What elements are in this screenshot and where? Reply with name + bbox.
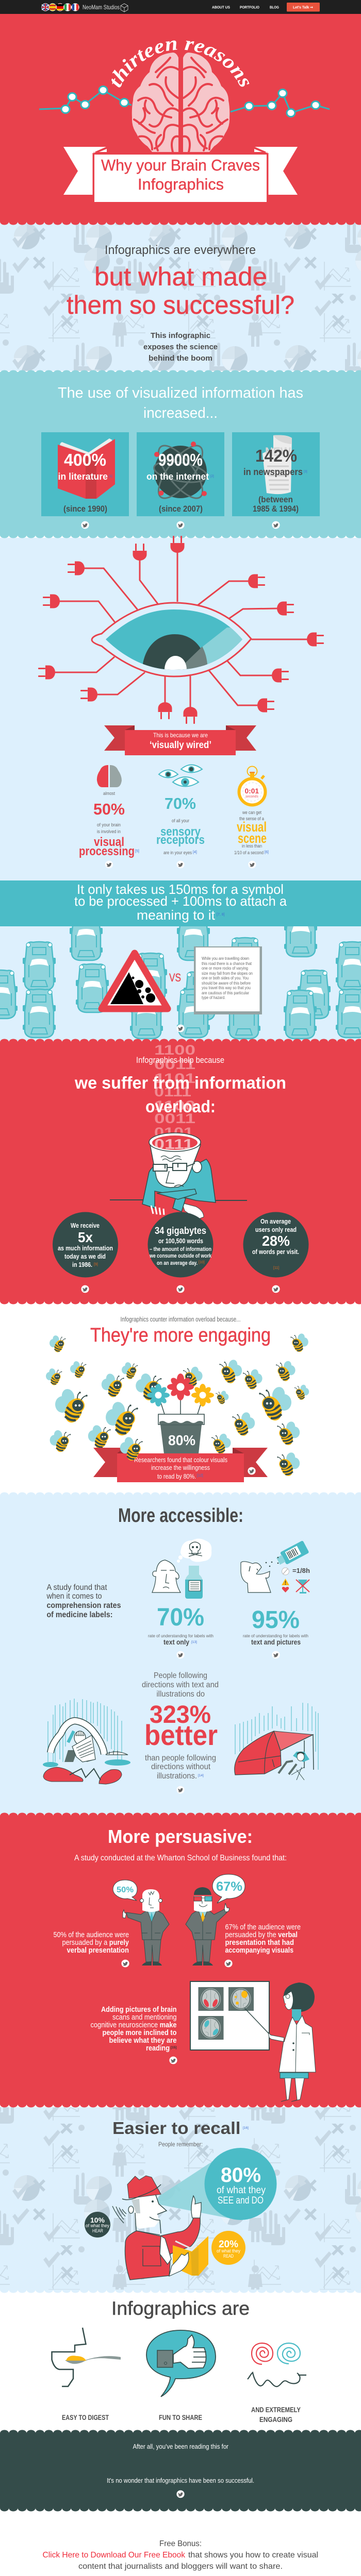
text: with visuals: persuaded by the verbal xyxy=(225,1930,298,1939)
section: conclusion: It's no wonder that infographics have been so successful. xyxy=(107,2477,254,2484)
circle: 34 gigabytes: 34 gigabytes xyxy=(155,1226,206,1236)
button: Let's Talk ➞ xyxy=(293,5,314,9)
illustration: flower pot xyxy=(147,1374,214,1454)
circle: 10%: HEAR xyxy=(92,2228,103,2233)
band: 150ms xyxy=(0,880,361,926)
heading: [16] xyxy=(243,2126,249,2130)
text: 323% better: [14] xyxy=(198,1774,204,1777)
panel: warning text: you travel this way so that you xyxy=(202,985,251,990)
text: 323% better: directions without xyxy=(151,1762,211,1771)
heading: People remember: xyxy=(158,2141,203,2148)
heading: Infographics are xyxy=(111,2298,250,2319)
heading xyxy=(112,2119,249,2148)
card: internet: [2] xyxy=(210,475,214,478)
chart line: right pulse xyxy=(231,90,330,116)
stat: 70% sensory receptors xyxy=(156,765,205,868)
arched title: thirteen reasons: thirteen reasons xyxy=(111,40,250,88)
intro text: Infographics are everywhere xyxy=(105,243,256,257)
panel: warning text: size may fall from the slopes on xyxy=(202,971,253,976)
text: brain scans claim: believe what they are xyxy=(109,2036,176,2045)
text: medicine labels intro: when it comes to xyxy=(46,1592,102,1601)
section: visually wired xyxy=(0,535,361,880)
section: more accessible xyxy=(0,1492,361,1815)
text: 323% better: illustrations. xyxy=(157,1772,197,1781)
icon: book xyxy=(58,438,115,499)
text: medicine labels intro: of medicine labels: xyxy=(46,1611,112,1619)
labels xyxy=(62,2405,301,2424)
share icon xyxy=(121,1960,129,1967)
navigation: PORTFOLIO xyxy=(240,5,259,9)
stat: 70% sensory receptors: sensory xyxy=(160,825,201,839)
stat: 70% text only: [13] xyxy=(191,1640,197,1644)
ribbon: 80%: increase the willingness xyxy=(151,1464,210,1471)
circle: 28%: [11] xyxy=(273,1266,279,1270)
navigation: BLOG xyxy=(270,5,279,9)
stat: 95% text and pictures xyxy=(243,1606,308,1658)
circle: 20%: READ xyxy=(223,2253,234,2259)
free bonus: that shows you how to create visual xyxy=(188,2551,318,2560)
text: 323% better: 323% xyxy=(150,1701,211,1728)
section: intro xyxy=(0,222,361,371)
card: newspapers: 142% xyxy=(255,446,297,465)
section: hero xyxy=(0,14,361,222)
labels: ENGAGING xyxy=(259,2415,292,2424)
text: brain scans claim: people more inclined to xyxy=(102,2028,176,2037)
card: internet: (since 2007) xyxy=(159,504,203,514)
illustration: man with pictogram label: =1/8h xyxy=(292,1567,310,1574)
callout: 50% speech bubble xyxy=(113,1880,137,1901)
panel: warning text: type of hazard. xyxy=(202,995,225,1000)
circle: 80%: 80% xyxy=(221,2164,261,2187)
card: internet: on the internet xyxy=(146,471,209,482)
binary stream: 1100 xyxy=(154,1042,195,1058)
circle: 20%: 20% xyxy=(219,2239,238,2250)
stat: 95% text and pictures: 95% xyxy=(252,1606,300,1634)
icon: skull xyxy=(189,1542,202,1556)
illustration: man reading xyxy=(112,2176,208,2280)
icon: warning sign xyxy=(102,953,168,1009)
free bonus xyxy=(42,2539,318,2571)
icon: stopwatch: seconds xyxy=(245,795,258,799)
stat: visual scene: 1/10 of a second xyxy=(234,850,264,856)
stat: 70% sensory receptors: of all your xyxy=(172,818,189,824)
beam xyxy=(154,2159,233,2219)
label: vs: VS xyxy=(169,971,181,984)
ribbon: 80%: [12] xyxy=(197,1474,203,1478)
heading: More accessible: xyxy=(118,1505,243,1527)
icon: thumbs up bubble xyxy=(146,2330,216,2397)
share icons xyxy=(81,1285,280,1293)
icon: brain xyxy=(132,53,229,152)
card: literature: in literature xyxy=(58,471,108,482)
card: newspapers: [3] xyxy=(304,470,307,473)
stat: 50% visual processing: processing xyxy=(79,844,135,858)
icon: brain halves xyxy=(97,765,122,787)
heading: increased... xyxy=(143,405,218,421)
stat: visual scene: we can get xyxy=(242,810,261,816)
text: with visuals: accompanying visuals xyxy=(225,1946,293,1955)
labels: AND EXTREMELY xyxy=(251,2405,301,2414)
binary stream: 1101 xyxy=(154,1071,195,1086)
navigation xyxy=(212,5,279,9)
stat: visual scene xyxy=(234,767,269,868)
stat: 70% sensory receptors: 70% xyxy=(165,794,196,812)
card: internet: 9900% xyxy=(158,450,203,469)
share icons xyxy=(81,521,280,529)
callout: 50% speech bubble: 50% xyxy=(117,1886,134,1894)
share icon xyxy=(169,2057,177,2064)
text: purely verbal: persuaded by a purely xyxy=(62,1938,129,1947)
text: brain scans claim: reading xyxy=(146,2044,170,2053)
panel: warning text: one or more rocks of varying xyxy=(202,965,248,971)
heading xyxy=(90,1316,271,1346)
text: brain scans claim: cognitive neuroscience make xyxy=(91,2021,176,2029)
card: literature: [1] xyxy=(109,475,112,478)
stat: visual scene: [6] xyxy=(265,851,269,854)
text: 323% better: directions with text and xyxy=(142,1681,219,1689)
circle: 5x: We receive xyxy=(71,1222,100,1229)
card: newspapers: (between xyxy=(258,495,293,504)
intro text: but what made xyxy=(94,262,267,291)
circle: 10%: of what they xyxy=(86,2223,109,2228)
banner title text: Why your Brain Craves xyxy=(101,156,260,174)
bees xyxy=(46,1333,309,1478)
callout: 67% speech bubble: 67% xyxy=(216,1879,242,1894)
icon: dizzy face xyxy=(248,2343,306,2386)
stat: visual scene: scene xyxy=(238,831,267,846)
icon: stopwatch xyxy=(239,767,265,805)
section: symbol versus text xyxy=(0,880,361,1042)
heading: They're more engaging xyxy=(90,1325,271,1346)
circle: 34 gigabytes: [10] xyxy=(199,1261,205,1264)
card: literature xyxy=(41,432,129,516)
text: 323% better: illustrations do xyxy=(157,1690,205,1699)
circle: 10% xyxy=(85,2212,110,2238)
text: purely verbal: verbal presentation xyxy=(67,1946,129,1955)
section: conclusion: After all, you've been reading this for xyxy=(133,2443,229,2450)
intro text: This infographic xyxy=(151,331,210,340)
circle: 5x: [9] xyxy=(94,1263,98,1266)
stat: visual scene: in less than xyxy=(242,843,262,849)
panel: warning text xyxy=(194,946,262,1014)
stat: 70% text only xyxy=(148,1604,214,1658)
illustration: cars xyxy=(0,908,361,1039)
text: medicine labels intro: A study found that xyxy=(46,1583,107,1592)
labels: FUN TO SHARE xyxy=(159,2413,202,2421)
text: brain scans claim xyxy=(91,2005,176,2053)
card: literature: 400% xyxy=(64,450,106,469)
stat: 70% text only: text only xyxy=(163,1638,189,1646)
card: newspapers xyxy=(232,432,320,516)
text: purely verbal xyxy=(54,1930,129,1955)
text: brain scans claim: Adding pictures of brain xyxy=(101,2005,176,2014)
circle: 34 gigabytes: – the amount of information xyxy=(150,1246,211,1252)
section: conclusion xyxy=(0,2430,361,2511)
labels: EASY TO DIGEST xyxy=(62,2413,109,2421)
binary stream: 0011 xyxy=(154,1057,195,1072)
ribbon: visually wired: This is because we are xyxy=(153,732,208,739)
text: with visuals xyxy=(225,1923,301,1955)
heading xyxy=(74,1826,287,1862)
heading: More persuasive: xyxy=(108,1826,253,1847)
text: with visuals: presentation that had xyxy=(225,1938,294,1947)
panel: warning text: should be aware of this before xyxy=(202,980,251,986)
circle: 28%: 28% xyxy=(262,1233,290,1249)
panel: brain scans xyxy=(190,1981,269,2050)
circle: 34 gigabytes: on an average day. xyxy=(157,1260,198,1266)
circle: 28% xyxy=(243,1212,308,1278)
icon: three eyes xyxy=(159,765,202,786)
share icon xyxy=(224,1960,233,1967)
circle: 20% xyxy=(211,2231,245,2265)
illustration: man under boat xyxy=(235,1703,318,1780)
text: 323% better xyxy=(142,1671,219,1793)
card: newspapers: in newspapers xyxy=(243,467,303,477)
illustration: man with pictogram label xyxy=(241,1540,310,1594)
intro text: them so successful? xyxy=(67,291,294,319)
illustration: presenter without visuals xyxy=(123,1889,169,1965)
stat: 50% visual processing: 50% xyxy=(93,800,125,818)
icon: cube xyxy=(121,4,128,12)
stat: visual scene: visual xyxy=(237,819,267,835)
stat: 70% text only: 70% xyxy=(157,1604,204,1631)
binary stream xyxy=(154,1042,195,1140)
binary stream: 0011 xyxy=(154,1111,195,1126)
illustration: presenter with visuals xyxy=(186,1887,229,1965)
illustration: wired eye xyxy=(38,536,324,724)
circle: 28%: users only read xyxy=(255,1226,297,1233)
band: 150ms: It only takes us 150ms for a symbol xyxy=(77,882,284,897)
circle: 34 gigabytes: or 100,500 words xyxy=(158,1237,203,1245)
panel: warning text: While you are travelling down xyxy=(202,956,249,961)
circle: 34 gigabytes xyxy=(147,1212,214,1278)
binary stream: 0101 xyxy=(154,1125,193,1140)
card: newspapers: 1985 & 1994) xyxy=(253,504,299,514)
panel: warning text: are cautious of this particular xyxy=(202,990,249,995)
free bonus: Click Here to Download Our Free Ebook xyxy=(42,2551,186,2560)
bee on ribbon xyxy=(120,1436,143,1462)
stat: visual scene: the sense of a xyxy=(239,816,265,822)
icon: stopwatch: 0:01 xyxy=(244,787,259,795)
heading: A study conducted at the Wharton School of Business found that: xyxy=(74,1854,287,1862)
circle: 80%: SEE and DO xyxy=(218,2195,264,2206)
band: 150ms: meaning to it xyxy=(137,907,216,923)
heading: Infographics help because xyxy=(136,1055,224,1065)
text: brain scans claim: scans and mentioning xyxy=(112,2013,176,2022)
icon: newspaper: NEW xyxy=(265,445,291,459)
title banner xyxy=(63,147,298,202)
stat: 95% text and pictures: text and pictures xyxy=(251,1638,301,1646)
intro text: behind the boom xyxy=(149,354,212,363)
icon: newspaper xyxy=(262,435,292,494)
circle: 5x xyxy=(53,1212,118,1278)
icon: globe xyxy=(151,439,210,505)
heading: Easier to recall xyxy=(112,2119,240,2138)
section: use of visualized information xyxy=(0,370,361,538)
citation 15: [15] xyxy=(171,2046,177,2049)
banner title text: Infographics xyxy=(138,175,224,193)
intro text xyxy=(67,243,294,363)
circle: 28%: of words per visit. xyxy=(252,1248,299,1256)
chart line: left pulse xyxy=(39,87,132,113)
circle: 20%: of what they xyxy=(217,2248,240,2254)
stat: 70% sensory receptors: are in your eyes xyxy=(163,850,192,856)
heading: we suffer from information xyxy=(74,1073,286,1092)
text: medicine labels intro xyxy=(46,1583,121,1619)
illustration: scientist xyxy=(244,1982,316,2102)
illustration: man getting wet xyxy=(43,1699,130,1784)
stat: 70% sensory receptors: receptors xyxy=(156,833,205,847)
navigation: ABOUT US xyxy=(212,5,230,9)
circle: 34 gigabytes: we consume outside of work xyxy=(149,1253,212,1259)
section: more persuasive xyxy=(0,1812,361,2105)
text: 323% better: People following xyxy=(154,1671,207,1680)
heading: The use of visualized information has xyxy=(58,385,303,401)
circle: 5x: 5x xyxy=(78,1229,93,1245)
text: 323% better: than people following xyxy=(145,1754,216,1762)
heading: overload: xyxy=(145,1097,216,1116)
circle: 5x: in 1986. xyxy=(72,1261,92,1268)
circle: 5x: as much information xyxy=(58,1244,113,1252)
ribbon: 80%: to read by 80%. xyxy=(157,1472,196,1480)
illustration: flower pot: 80% xyxy=(168,1432,195,1448)
stat: 70% text only: rate of understanding for labels with xyxy=(148,1633,214,1638)
circle: 5x: today as we did xyxy=(64,1252,106,1260)
binary stream: 0111 xyxy=(154,1084,191,1099)
panel: warning text: this road there is a chance that xyxy=(202,961,252,966)
illustration: overloaded man xyxy=(110,1133,247,1219)
stat: 50% visual processing xyxy=(79,765,139,868)
text: with visuals: 67% of the audience were xyxy=(225,1923,301,1931)
illustration: confused man and bottle xyxy=(152,1538,211,1599)
logo text: NeoMam Studios xyxy=(83,4,120,11)
heading xyxy=(74,1055,286,1116)
stat: 50% visual processing: almost xyxy=(103,791,115,796)
ribbon: visually wired: ‘visually wired’ xyxy=(150,740,211,751)
section: more engaging xyxy=(46,1316,309,1482)
band: 150ms: [7, 8] xyxy=(217,913,225,917)
text: medicine labels intro: comprehension rates xyxy=(46,1601,121,1610)
card: literature: (since 1990) xyxy=(63,504,107,514)
banner title text xyxy=(101,156,260,193)
section: infographics are xyxy=(0,2290,361,2430)
stat: 50% visual processing: [5] xyxy=(135,850,139,853)
illustration: overloaded man: 0111 xyxy=(154,1136,193,1152)
section: information overload xyxy=(0,1039,361,1304)
free bonus: Free Bonus: xyxy=(159,2539,202,2548)
button xyxy=(287,3,320,11)
stat: 50% visual processing: visual xyxy=(94,835,124,849)
stat: 70% sensory receptors: [4] xyxy=(193,851,197,854)
heading xyxy=(58,385,303,421)
card: internet xyxy=(137,432,224,516)
callout: 67% speech bubble xyxy=(212,1874,245,1903)
ribbon: 80% xyxy=(93,1448,268,1482)
binary stream: 1100 xyxy=(154,1098,195,1113)
free bonus: content that journalists and bloggers will want to share. xyxy=(78,2562,283,2571)
circle: 10%: 10% xyxy=(90,2216,105,2224)
stat: 50% visual processing: is involved in xyxy=(97,829,121,835)
ribbon: 80%: Researchers found that colour visuals xyxy=(134,1456,227,1464)
ribbon: visually wired xyxy=(104,725,256,755)
circle: 28%: On average xyxy=(260,1217,291,1225)
circle: 80%: of what they xyxy=(217,2185,266,2196)
band: 150ms: to be processed + 100ms to attach a xyxy=(74,893,287,909)
text: 323% better: better xyxy=(144,1719,218,1751)
flags xyxy=(42,4,79,11)
heading: Infographics counter information overload because... xyxy=(121,1316,240,1323)
stat: 95% text and pictures: rate of understanding for labels with xyxy=(243,1633,308,1638)
text: purely verbal: 50% of the audience were xyxy=(54,1930,129,1939)
intro text: exposes the science xyxy=(143,343,218,351)
circle: 80% xyxy=(204,2148,276,2220)
panel: warning text: one or both sides of you. You xyxy=(202,975,249,980)
section: easier to recall xyxy=(0,2104,361,2290)
icon: spoon face xyxy=(52,2328,121,2386)
header bar xyxy=(0,0,361,14)
stat: 50% visual processing: of your brain xyxy=(97,822,121,828)
